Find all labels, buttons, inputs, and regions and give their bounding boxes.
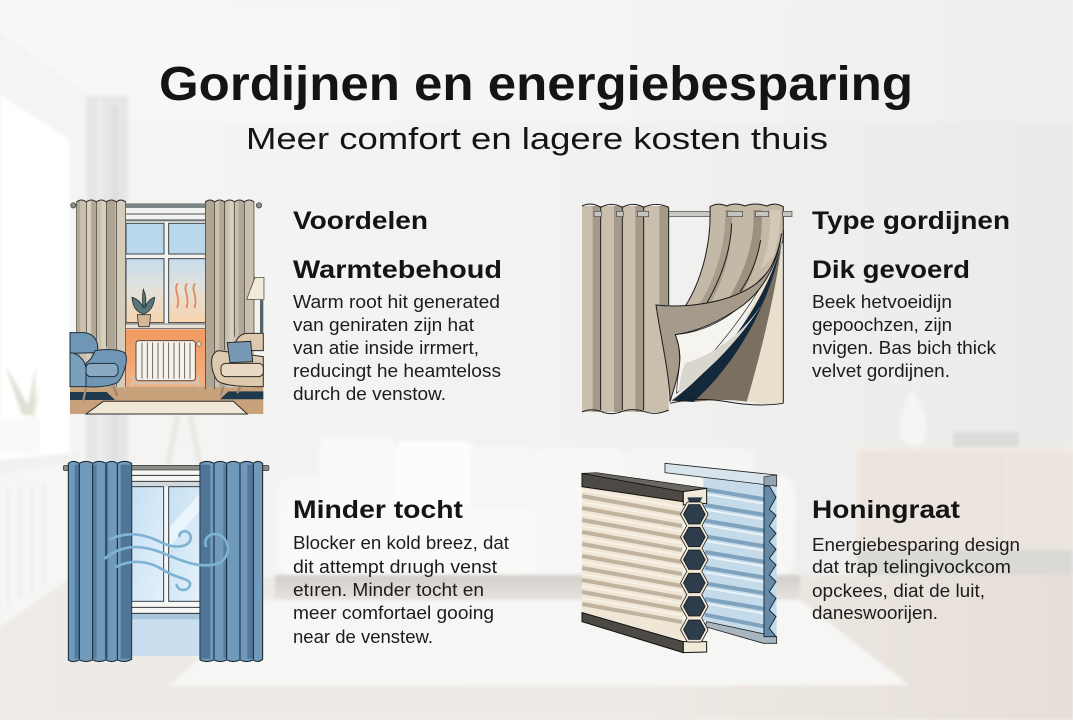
dark lining layers [672, 240, 782, 402]
text block: minder tocht [293, 533, 509, 647]
right curtain back drape [685, 204, 783, 307]
heading: dik gevoerd: Dik gevoerd [812, 256, 970, 284]
wall under window [126, 329, 206, 388]
illustration: honeycomb cellular shades [582, 463, 777, 653]
text block: dik gevoerd: velvet gordijnen. [812, 361, 950, 381]
text block: minder tocht: etıren. Minder tocht en [293, 580, 484, 600]
illustration: thick lined curtain [582, 204, 792, 414]
curtain hem [670, 230, 783, 405]
title: Gordijnen en energiebesparing [159, 58, 913, 111]
heading: type gordijnen: Type gordijnen [812, 207, 1010, 235]
subtitle: Meer comfort en lagere kosten thuis [246, 121, 828, 156]
panel: minder tocht [63, 461, 509, 662]
beige sofa and cushion [212, 333, 263, 396]
heat waves [176, 284, 196, 307]
box on sideboard [953, 432, 1019, 447]
text block: warmtebehoud [293, 292, 501, 404]
plant [2, 365, 40, 454]
text block: honingraat: dat trap telingivockcom [812, 557, 1011, 577]
heading: warmtebehoud: Warmtebehoud [293, 256, 502, 284]
panel: type gordijnen / dik gevoerd [582, 204, 1010, 414]
right curtain [200, 461, 263, 662]
front beige shade [582, 473, 707, 653]
text block: honingraat [812, 535, 1020, 623]
left curtain [77, 200, 126, 387]
text block: warmtebehoud: Warm root hit generated [293, 292, 500, 312]
heading: voordelen: Voordelen [293, 207, 428, 235]
text block: dik gevoerd: nvigen. Bas bich thick [812, 338, 997, 358]
text block: dik gevoerd: Beek hetvoeidijn [812, 292, 952, 312]
text block: warmtebehoud: van atie inside irrmert, [293, 338, 479, 358]
text block: minder tocht: near de venstew. [293, 627, 433, 647]
plant on sill [132, 289, 155, 327]
text block: dik gevoerd [812, 292, 997, 381]
radiator [133, 341, 201, 387]
text block: warmtebehoud: durch de venstow. [293, 384, 446, 404]
text block: warmtebehoud: reducingt he heamteloss [293, 361, 501, 381]
vase [900, 388, 927, 446]
rod [662, 211, 792, 217]
rug [170, 600, 909, 686]
text block: honingraat: daneswoorijen. [812, 603, 938, 623]
window glow [0, 95, 70, 465]
rod [63, 465, 269, 471]
text block: minder tocht: Blocker en kold breez, dat [293, 533, 509, 553]
ceiling [0, 0, 1073, 122]
text block: honingraat: opckees, diat de luit, [812, 581, 985, 601]
window [123, 203, 207, 333]
window [132, 465, 200, 656]
sofa [275, 437, 800, 600]
blue armchair [70, 333, 126, 401]
text block: honingraat: Energiebesparing design [812, 535, 1020, 555]
curtain face [670, 230, 783, 405]
back blue shade [665, 463, 777, 643]
left pleats [582, 204, 669, 414]
grommets [594, 211, 792, 217]
illustration: blue curtains with draught [63, 461, 269, 662]
panel: voordelen / warmtebehoud [70, 200, 502, 414]
curtain rod [71, 203, 262, 208]
floor lamp [247, 277, 264, 333]
panel: honingraat [582, 463, 1020, 653]
floor [0, 575, 1073, 720]
illustration: warm room with window, radiator and curtains [70, 200, 264, 414]
honeycomb cross-section [682, 488, 707, 653]
text block: dik gevoerd: gepoochzen, zijn [812, 315, 952, 335]
floor lamp legs [168, 415, 200, 465]
left curtain [68, 461, 132, 662]
sideboard [857, 447, 1073, 575]
heading: honingraat: Honingraat [812, 496, 961, 524]
left wall [0, 32, 128, 470]
heading: minder tocht: Minder tocht [293, 496, 464, 524]
text block: minder tocht: meer comfortael gooing [293, 603, 494, 623]
right curtain [205, 200, 254, 389]
room curtain [86, 96, 128, 466]
floor and rug [70, 387, 263, 414]
wind swirls [105, 531, 228, 590]
folded corner [656, 233, 782, 402]
text block: warmtebehoud: van geniraten zijn hat [293, 315, 474, 335]
radiator [0, 452, 78, 627]
text block: minder tocht: dit attempt drıugh venst [293, 557, 497, 577]
